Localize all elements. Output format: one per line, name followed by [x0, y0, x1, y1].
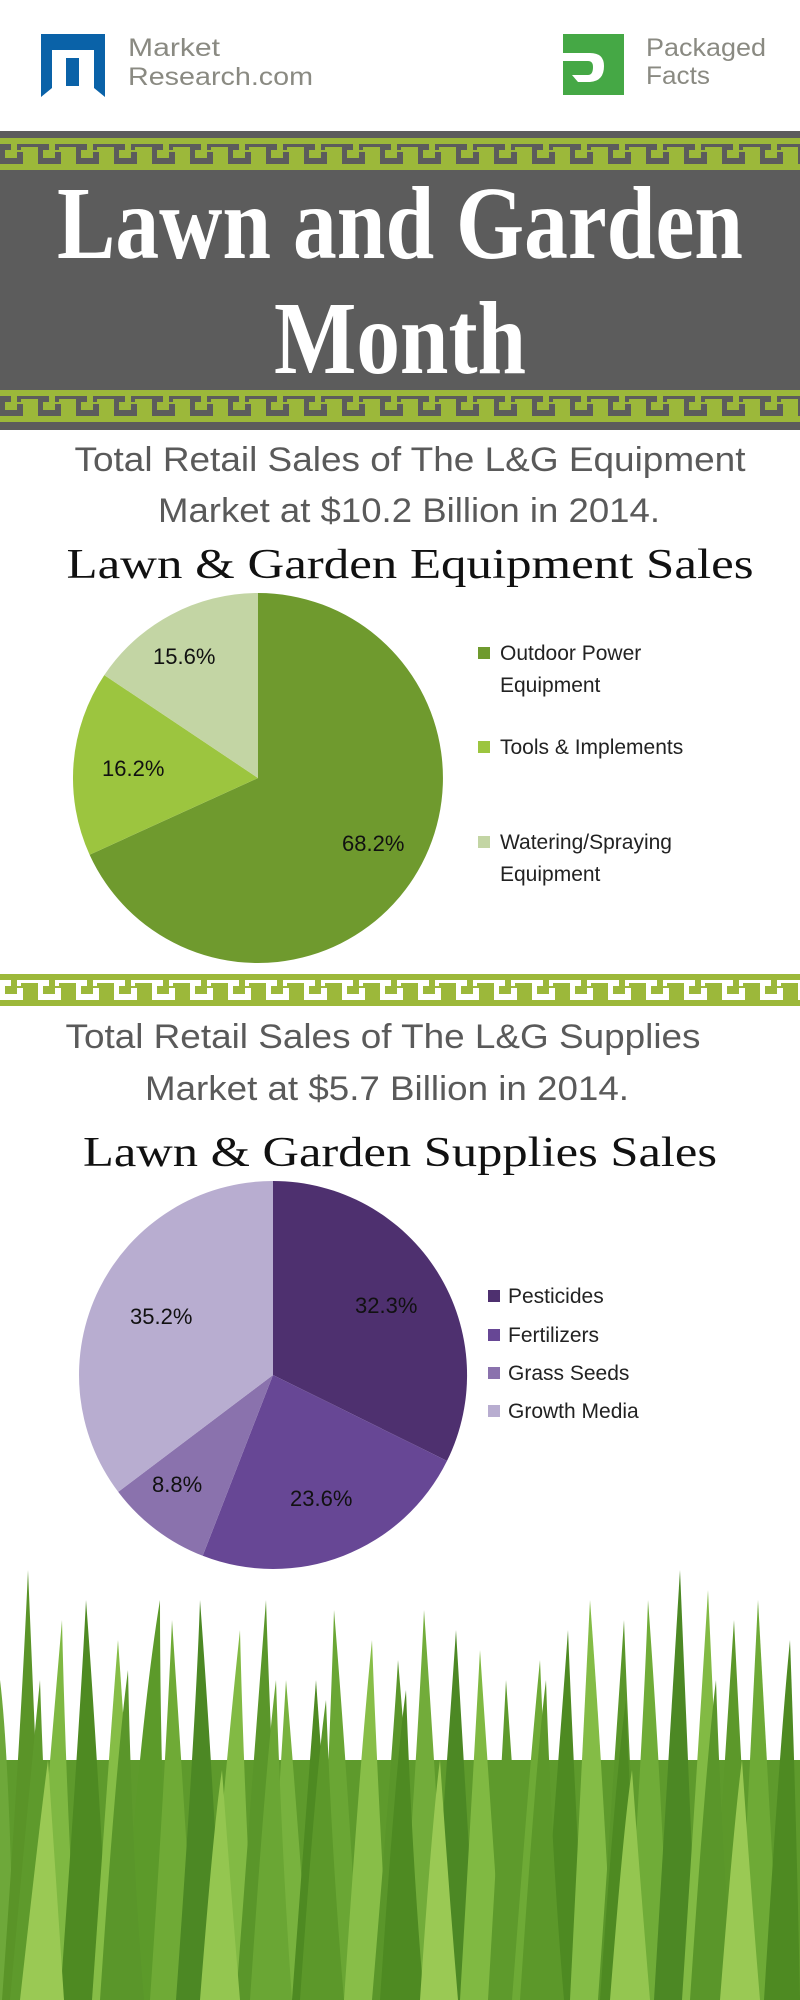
heading: supplies sales: Lawn & Garden Supplies Sales	[83, 1130, 717, 1176]
subtitle: equipment market: Market at $10.2 Billion in 2014.	[158, 492, 660, 530]
legend: equipment	[478, 642, 683, 886]
logo: MarketResearch.com: Market	[128, 34, 220, 62]
logo: Packaged Facts: Facts	[646, 62, 710, 90]
subtitle: supplies market	[66, 1018, 700, 1108]
title text: Month	[274, 281, 526, 396]
legend: supplies: Fertilizers	[508, 1324, 599, 1347]
legend: supplies: Pesticides	[508, 1285, 604, 1308]
subtitle: equipment market: Total Retail Sales of The L&G Equipment	[74, 441, 746, 479]
grass illustration	[0, 1570, 800, 2000]
legend: supplies: Grass Seeds	[508, 1362, 629, 1385]
pie chart: supplies: 32.3%	[355, 1293, 417, 1318]
heading: equipment sales: Lawn & Garden Equipment Sales	[66, 542, 754, 588]
logo: Packaged Facts: Packaged	[646, 34, 766, 62]
legend: equipment: Watering/Spraying	[500, 831, 672, 854]
pie chart: equipment	[73, 593, 443, 963]
subtitle: supplies market: Total Retail Sales of The L&G Supplies	[66, 1018, 700, 1056]
pie chart: supplies	[79, 1181, 467, 1569]
title banner	[0, 131, 800, 430]
legend: equipment: Outdoor Power	[500, 642, 641, 665]
pie chart: equipment: 68.2%	[342, 831, 404, 856]
legend: equipment: Tools & Implements	[500, 736, 683, 759]
title text	[57, 166, 743, 396]
pie chart: supplies: 8.8%	[152, 1472, 202, 1497]
legend: equipment: Equipment	[500, 863, 601, 886]
pie chart: supplies: 35.2%	[130, 1304, 192, 1329]
pie chart: equipment: 15.6%	[153, 644, 215, 669]
logo: MarketResearch.com	[41, 34, 313, 97]
legend: supplies	[488, 1285, 639, 1423]
pie chart: supplies: 23.6%	[290, 1486, 352, 1511]
legend: equipment: Equipment	[500, 674, 601, 697]
subtitle: equipment market	[74, 441, 746, 530]
logo: Packaged Facts	[563, 34, 766, 95]
legend: supplies: Growth Media	[508, 1400, 639, 1423]
subtitle: supplies market: Market at $5.7 Billion in 2014.	[145, 1070, 629, 1108]
pie chart: equipment: 16.2%	[102, 756, 164, 781]
logo: MarketResearch.com: Research.com	[128, 63, 313, 91]
